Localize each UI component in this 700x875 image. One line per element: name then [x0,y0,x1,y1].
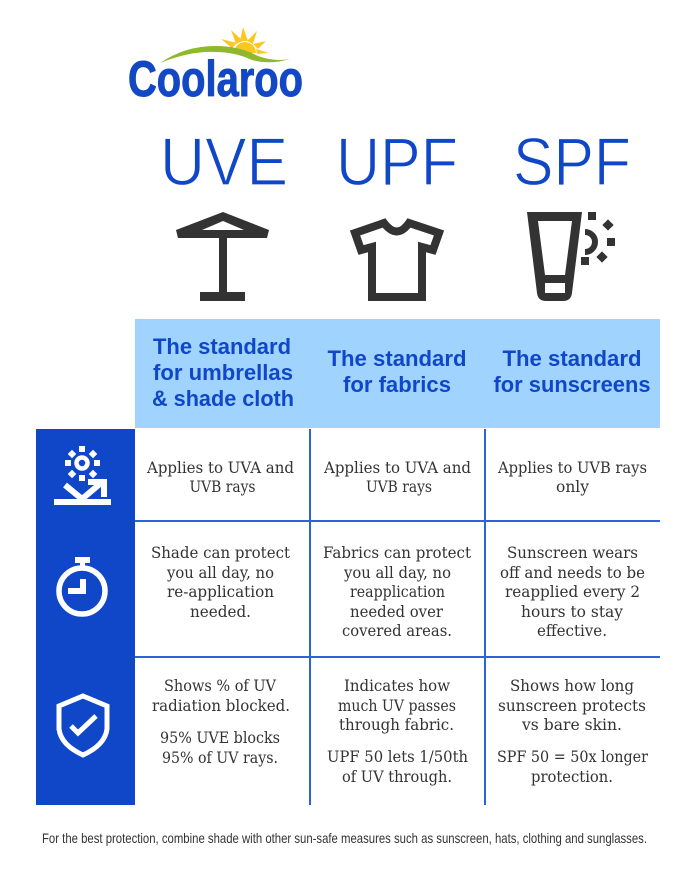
cell: SPF rays: Applies to UVB rays [497,458,647,477]
cell: UPF meaning: UPF 50 lets 1/50th [327,747,468,766]
logo: Coolaroo [128,27,303,107]
cell: SPF rays [497,458,647,496]
cell: UVE duration: Shade can protect [151,543,291,562]
cell: UVE duration: re-application [167,582,274,601]
logo wordmark: Coolaroo [128,51,303,107]
header: umbrellas: The standard [153,334,291,359]
cell: UPF duration: you all day, no [343,563,451,582]
cell: UVE meaning: 95% UVE blocks [160,728,280,747]
cell: SPF meaning: SPF 50 = 50x longer [497,747,648,766]
heading: SPF: SPF [513,124,631,200]
cell: SPF duration: hours to stay [521,602,623,621]
cell: SPF rays: only [556,477,589,496]
cell: UPF meaning: of UV through. [342,767,452,786]
cell: UVE meaning [152,676,290,767]
panel: icon sidebar [36,429,135,805]
cell: UPF duration: Fabrics can protect [323,543,472,562]
cell: SPF meaning: sunscreen protects [498,696,646,715]
grid lines [135,429,660,805]
cell: SPF meaning: vs bare skin. [521,715,622,734]
icon: umbrella [176,212,269,301]
row: duration [151,543,645,640]
header: sunscreens [494,346,650,397]
cell: SPF meaning [497,676,648,786]
cell: UPF rays [323,458,471,496]
header: fabrics: for fabrics [343,372,451,397]
header: umbrellas: for umbrellas [153,360,293,385]
cell: UVE meaning: radiation blocked. [152,696,290,715]
cell: SPF meaning: Shows how long [510,676,634,695]
row: rating meaning [152,676,648,786]
header: sunscreens: for sunscreens [494,372,650,397]
heading: UPF: UPF [336,124,458,200]
header: fabrics [328,346,466,397]
cell: UVE duration: you all day, no [166,563,274,582]
cell: SPF duration [500,543,645,640]
heading: UVE: UVE [160,124,288,200]
cell: UPF meaning [327,676,468,786]
cell: UPF meaning: much UV passes [338,696,456,715]
icon: stopwatch [59,557,105,614]
cell: SPF duration: Sunscreen wears [507,543,638,562]
header: umbrellas [152,334,294,411]
icon: shield check [59,696,107,755]
icon: t-shirt [355,223,439,297]
header: sunscreens: The standard [502,346,642,371]
cell: UPF duration [323,543,472,640]
cell: UVE duration: needed. [190,602,251,621]
cell: SPF duration: off and needs to be [500,563,645,582]
cell: UPF duration: needed over [350,602,443,621]
cell: UPF meaning: through fabric. [339,715,454,734]
header: umbrellas: & shade cloth [152,386,294,411]
row: rays covered [146,458,647,496]
cell: UPF meaning: Indicates how [344,676,450,695]
cell: SPF meaning: protection. [531,767,613,786]
cell: UPF duration: covered areas. [342,621,452,640]
cell: SPF duration: effective. [537,621,607,640]
cell: UVE meaning: Shows % of UV [164,676,276,695]
header: fabrics: The standard [328,346,466,371]
cell: UPF rays: UVB rays [366,477,432,496]
icon: sun rays reflecting [54,446,111,505]
cell: UPF rays: Applies to UVA and [323,458,471,477]
cell: UVE duration [151,543,291,621]
cell: SPF duration: reapplied every 2 [505,582,640,601]
icon: sunscreen tube [527,212,615,301]
logo swoosh [160,46,290,63]
cell: UVE rays: Applies to UVA and [146,458,294,477]
cell: UVE meaning: 95% of UV rays. [162,748,278,767]
cell: UPF duration: reapplication [350,582,445,601]
cell: UVE rays: UVB rays [190,477,256,496]
icon: logo sun [221,27,269,54]
panel: header band [135,319,660,428]
cell: UVE rays [146,458,294,496]
